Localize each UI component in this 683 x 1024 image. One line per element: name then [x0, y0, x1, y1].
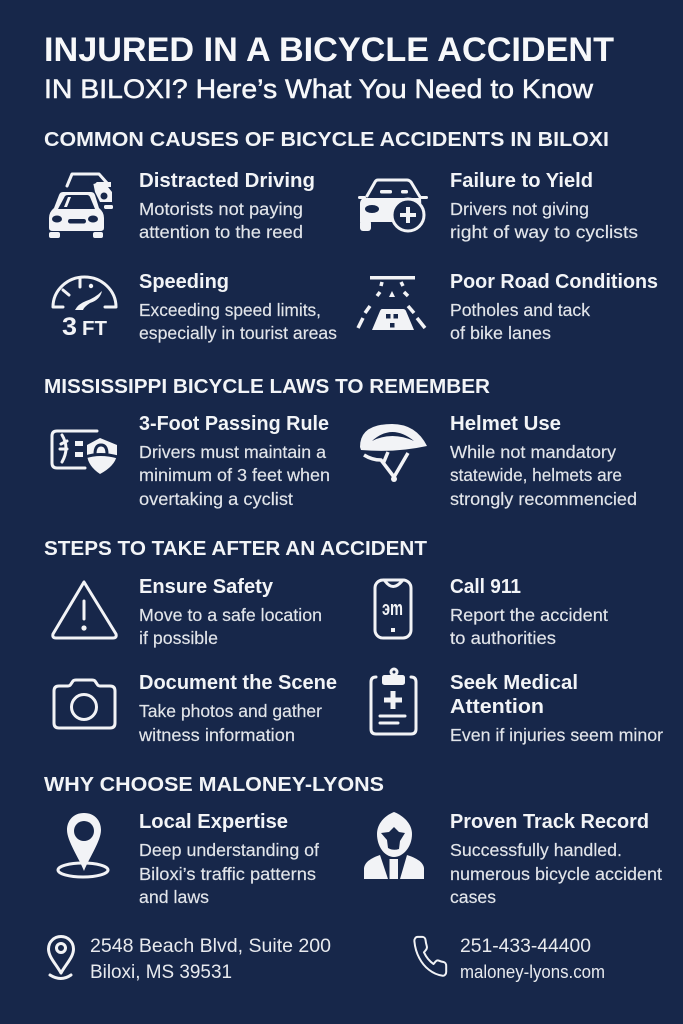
icon: helmet — [360, 424, 427, 482]
text: proven track record: numerous bicycle accident — [450, 864, 662, 884]
title: IN BILOXI? Here’s What You Need to Know — [44, 74, 594, 104]
text: proven track record — [450, 811, 662, 907]
text: helmet use: Helmet Use — [450, 413, 561, 435]
heading: common causes: COMMON CAUSES OF BICYCLE ACCIDENTS IN BILOXI — [44, 128, 609, 151]
text: 3-foot passing rule: Drivers must maintain a — [139, 442, 326, 462]
text: 3-foot passing rule: minimum of 3 feet when — [139, 465, 330, 485]
text: proven track record: Proven Track Record — [450, 811, 649, 833]
icon: road — [358, 276, 425, 330]
text: document the scene: Take photos and gather — [139, 701, 322, 721]
text: phone and website — [460, 936, 605, 982]
icon: attorney figure — [364, 812, 424, 879]
text: 3-foot passing rule: 3-Foot Passing Rule — [139, 413, 329, 435]
text: address: Biloxi, MS 39531 — [90, 962, 232, 983]
item: speeding — [53, 271, 337, 343]
text: document the scene — [138, 672, 337, 745]
text: call 911: Report the accident — [450, 605, 608, 625]
text: local expertise: Deep understanding of — [139, 840, 319, 860]
icon: speedometer 3 ft: FT — [82, 318, 107, 340]
panel: bicycle laws — [44, 375, 637, 509]
text: proven track record: Successfully handled. — [450, 840, 622, 860]
text: distracted driving: Motorists not paying — [139, 199, 303, 219]
text: 3-foot passing rule — [139, 413, 330, 509]
text: failure to yield — [450, 170, 638, 242]
text: poor road conditions: of bike lanes — [450, 323, 551, 343]
text: poor road conditions: Potholes and tack — [450, 300, 590, 320]
icon: car with plus — [358, 180, 428, 231]
text: seek medical attention: Even if injuries seem minor — [450, 725, 663, 745]
text: document the scene: witness information — [138, 725, 295, 745]
item: ensure safety — [53, 576, 322, 648]
icon: smartphone — [375, 580, 411, 638]
text: failure to yield: Drivers not giving — [450, 199, 589, 219]
item: proven track record — [364, 811, 662, 907]
text: speeding: especially in tourist areas — [139, 323, 337, 343]
text: speeding — [139, 271, 337, 343]
item: helmet use — [360, 413, 637, 509]
item: 3-foot passing rule — [52, 413, 330, 509]
heading: why choose: WHY CHOOSE MALONEY-LYONS — [44, 773, 384, 796]
text: failure to yield: right of way to cyclists — [450, 222, 638, 242]
text: distracted driving: Distracted Driving — [139, 170, 315, 192]
text: helmet use: strongly recommencied — [450, 489, 637, 509]
text: proven track record: cases — [450, 887, 496, 907]
icon: medical clipboard — [371, 669, 416, 734]
icon: speedometer 3 ft: 3 — [62, 313, 77, 341]
text: poor road conditions — [450, 271, 658, 343]
text: address — [90, 936, 331, 983]
text: speeding: Speeding — [139, 271, 229, 293]
icon: location outline — [48, 936, 74, 978]
heading: steps: STEPS TO TAKE AFTER AN ACCIDENT — [44, 537, 427, 560]
icon: warning triangle — [53, 582, 116, 638]
text: phone and website: maloney-lyons.com — [460, 962, 605, 982]
text: ensure safety — [139, 576, 322, 648]
icon: smartphone: эm — [382, 598, 403, 620]
icon: map pin — [58, 813, 108, 877]
item: document the scene — [54, 672, 337, 745]
title — [44, 31, 614, 104]
heading: bicycle laws: MISSISSIPPI BICYCLE LAWS TO REMEMBER — [44, 375, 490, 398]
text: phone and website: 251-433-44400 — [460, 936, 591, 957]
text: failure to yield: Failure to Yield — [450, 170, 593, 192]
text: local expertise: Biloxi’s traffic patterns — [139, 864, 316, 884]
icon: camera — [54, 680, 115, 728]
text: local expertise: Local Expertise — [139, 811, 288, 833]
text: call 911: Call 911 — [450, 576, 521, 598]
icon: two cars — [49, 174, 113, 238]
item: call 911 — [375, 576, 608, 648]
text: helmet use: statewide, helmets are — [450, 465, 622, 485]
text: helmet use: While not mandatory — [450, 442, 616, 462]
item: seek medical attention — [371, 669, 663, 745]
icon: speedometer 3 ft — [53, 277, 116, 341]
text: ensure safety: if possible — [139, 628, 218, 648]
text: distracted driving — [139, 170, 315, 242]
item: distracted driving — [49, 170, 315, 242]
item: failure to yield — [358, 170, 638, 242]
text: call 911 — [450, 576, 608, 648]
item: local expertise — [58, 811, 319, 907]
text: distracted driving: attention to the reed — [139, 222, 303, 242]
text: helmet use — [450, 413, 637, 509]
text: local expertise: and laws — [139, 887, 209, 907]
text: 3-foot passing rule: overtaking a cyclist — [139, 489, 293, 509]
title: INJURED IN A BICYCLE ACCIDENT — [44, 31, 614, 69]
text: seek medical attention: Seek Medical — [450, 672, 578, 694]
panel: why choose maloney-lyons — [44, 773, 662, 907]
panel: steps after an accident — [44, 537, 663, 745]
icon: telephone — [414, 937, 446, 976]
text: seek medical attention — [450, 672, 663, 745]
icon: id card with shield — [52, 431, 118, 474]
text: speeding: Exceeding speed limits, — [139, 300, 321, 320]
text: call 911: to authorities — [450, 628, 556, 648]
text: document the scene: Document the Scene — [139, 672, 337, 694]
panel: common causes — [44, 128, 658, 343]
text: local expertise — [139, 811, 319, 907]
text: ensure safety: Ensure Safety — [139, 576, 274, 598]
text: address: 2548 Beach Blvd, Suite 200 — [90, 936, 331, 957]
text: ensure safety: Move to a safe location — [139, 605, 322, 625]
panel: contact footer — [48, 936, 605, 983]
item: poor road conditions — [358, 271, 658, 343]
text: seek medical attention: Attention — [450, 696, 544, 718]
text: poor road conditions: Poor Road Conditions — [450, 271, 658, 293]
